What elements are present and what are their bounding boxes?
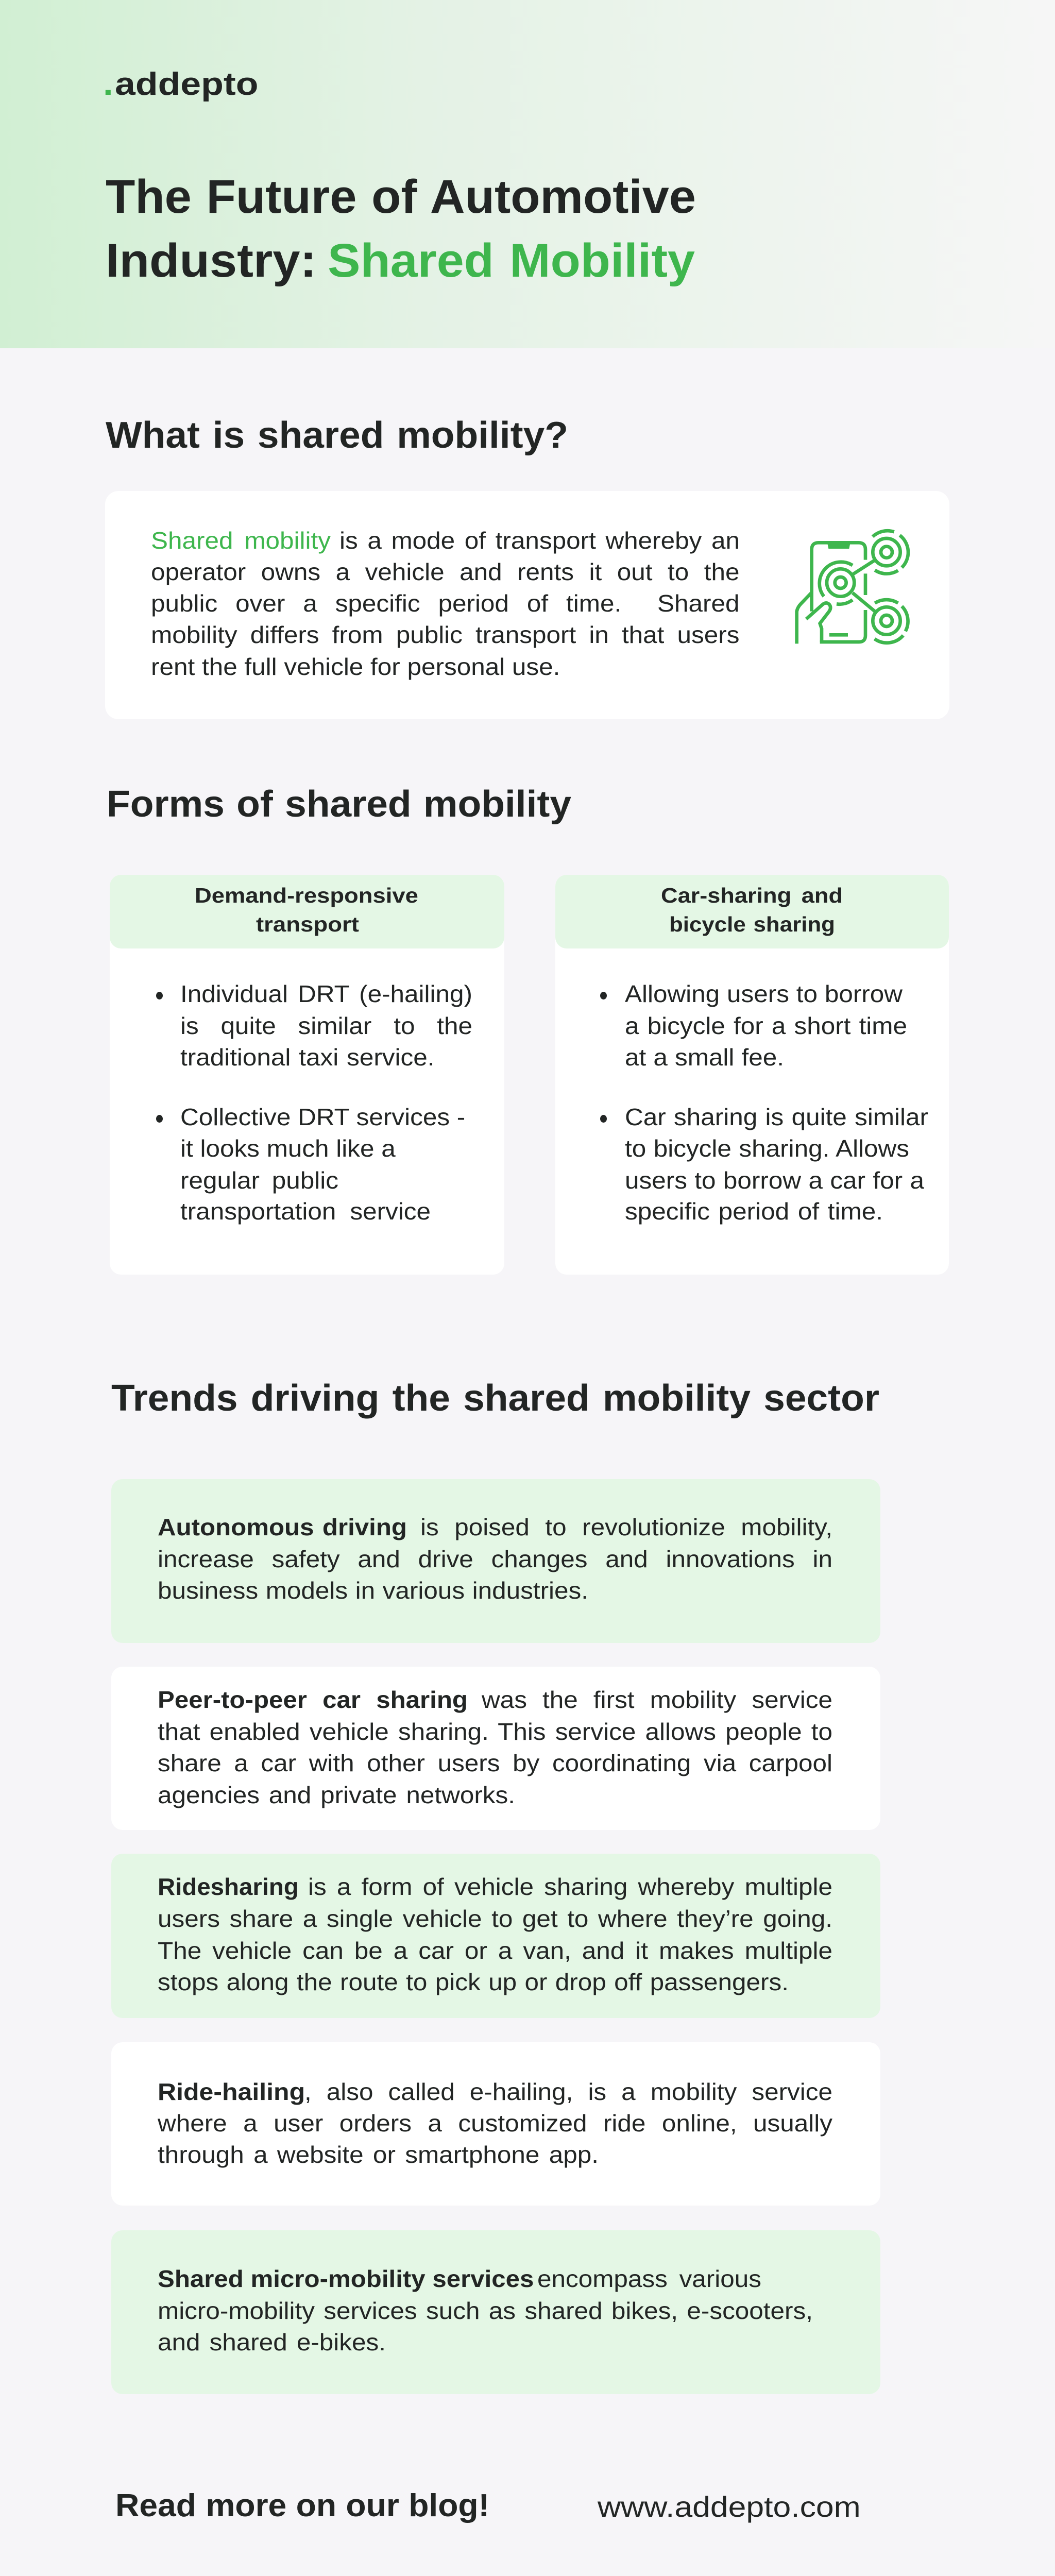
bullet: car sharing: to bicycle sharing. Allows xyxy=(625,1135,909,1162)
bullet: individual DRT: Individual DRT (e-hailing) xyxy=(180,980,472,1007)
bullet: collective DRT: it looks much like a xyxy=(180,1135,396,1162)
bullet: collective DRT: regular public xyxy=(180,1167,338,1194)
text block: definition: is a mode of transport whereby an xyxy=(339,527,739,554)
bullet: individual DRT: traditional taxi service. xyxy=(180,1044,434,1071)
bullet: individual DRT xyxy=(156,980,472,1071)
text block: autonomous driving: business models in various industries. xyxy=(158,1577,588,1604)
text block: shared micro-mobility services xyxy=(158,2265,813,2355)
text block: definition xyxy=(151,527,739,680)
text block: peer-to-peer car sharing xyxy=(158,1686,832,1808)
panel: autonomous driving xyxy=(111,1479,880,1643)
text block: ride-hailing: , also called e-hailing, is a mobility service xyxy=(304,2078,832,2105)
logo: addepto: . xyxy=(103,66,113,102)
bullet: car sharing: users to borrow a car for a xyxy=(625,1167,924,1194)
card header: car-sharing and bicycle sharing: bicycle sharing xyxy=(669,912,835,936)
panel: ridesharing xyxy=(111,1854,880,2018)
text block: shared micro-mobility services: encompass various xyxy=(537,2265,761,2292)
bullet: car sharing: specific period of time. xyxy=(625,1198,883,1225)
text block: ridesharing xyxy=(158,1873,832,1995)
text block: shared micro-mobility services: Shared micro-mobility services xyxy=(158,2265,534,2292)
panel: peer-to-peer car sharing xyxy=(111,1667,880,1830)
panel: demand-responsive transport xyxy=(110,875,504,1275)
text block: definition: mobility differs from public transport in that users xyxy=(151,621,739,648)
text block: definition: rent the full vehicle for personal use. xyxy=(151,653,560,680)
bullet: collective DRT: transportation service xyxy=(180,1198,431,1225)
text block: ridesharing: is a form of vehicle sharing whereby multiple xyxy=(308,1873,832,1900)
card header: car-sharing and bicycle sharing xyxy=(555,875,949,948)
logo: addepto: addepto xyxy=(115,66,258,102)
panel: ride-hailing xyxy=(111,2042,880,2206)
bullet: collective DRT xyxy=(156,1104,465,1225)
text block: shared micro-mobility services: and shared e-bikes. xyxy=(158,2329,386,2355)
bullet: bicycle sharing xyxy=(600,980,907,1071)
panel: shared micro-mobility services xyxy=(111,2230,880,2394)
footer call to action: Read more on our blog! xyxy=(115,2488,489,2523)
title: The Future of Automotive xyxy=(106,171,696,223)
text block: peer-to-peer car sharing: share a car with other users by coordinating via carpool xyxy=(158,1750,832,1776)
header banner xyxy=(0,0,1055,348)
text block: ridesharing: Ridesharing xyxy=(158,1873,299,1900)
text block: ridesharing: The vehicle can be a car or a van, and it makes multiple xyxy=(158,1937,832,1964)
text block: peer-to-peer car sharing: was the first mobility service xyxy=(482,1686,832,1713)
text block: peer-to-peer car sharing: Peer-to-peer car sharing xyxy=(158,1686,468,1713)
text block: ride-hailing: Ride-hailing xyxy=(158,2078,305,2105)
bullet: car sharing xyxy=(600,1104,928,1225)
title: Industry: xyxy=(106,234,316,287)
bullet: car sharing: Car sharing is quite similar xyxy=(625,1104,928,1130)
text block: peer-to-peer car sharing: agencies and private networks. xyxy=(158,1782,515,1808)
footer website address: www.addepto.com xyxy=(598,2490,861,2523)
text block: autonomous driving: increase safety and drive changes and innovations in xyxy=(158,1546,832,1572)
bullet: collective DRT: Collective DRT services - xyxy=(180,1104,465,1130)
heading: forms of shared mobility: Forms of shared mobility xyxy=(107,784,571,825)
panel: definition of shared mobility xyxy=(105,491,949,719)
panel: car-sharing and bicycle sharing xyxy=(555,875,949,1275)
text block: shared micro-mobility services: micro-mobility services such as shared bikes, e-scooters, xyxy=(158,2297,813,2324)
text block: autonomous driving: Autonomous driving xyxy=(158,1514,407,1540)
bullet: bicycle sharing: Allowing users to borrow xyxy=(625,980,903,1007)
card header: car-sharing and bicycle sharing: Car-sharing and xyxy=(661,884,843,907)
card header: demand-responsive transport xyxy=(110,875,504,948)
text block: definition: operator owns a vehicle and rents it out to the xyxy=(151,558,739,585)
text block: definition: public over a specific period of time. Shared xyxy=(151,590,739,617)
card header: demand-responsive transport: transport xyxy=(256,912,359,936)
text block: ride-hailing: through a website or smartphone app. xyxy=(158,2141,599,2168)
text block: peer-to-peer car sharing: that enabled vehicle sharing. This service allows people to xyxy=(158,1718,832,1745)
text block: ride-hailing: where a user orders a customized ride online, usually xyxy=(158,2110,832,2137)
text block: ride-hailing xyxy=(158,2078,832,2168)
title xyxy=(106,171,696,287)
bullet: bicycle sharing: at a small fee. xyxy=(625,1044,784,1071)
text block: autonomous driving xyxy=(158,1514,832,1604)
text block: autonomous driving: is poised to revolutionize mobility, xyxy=(420,1514,832,1540)
heading: trends driving the shared mobility sector: Trends driving the shared mobility sector xyxy=(111,1378,879,1419)
bullet: individual DRT: is quite similar to the xyxy=(180,1012,472,1039)
text block: ridesharing: users share a single vehicle to get to where they’re going. xyxy=(158,1905,832,1932)
title: Shared Mobility xyxy=(328,234,695,287)
text block: ridesharing: stops along the route to pick up or drop off passengers. xyxy=(158,1969,789,1995)
card header: demand-responsive transport: Demand-responsive xyxy=(195,884,418,907)
bullet: bicycle sharing: a bicycle for a short time xyxy=(625,1012,907,1039)
heading: what is shared mobility: What is shared mobility? xyxy=(106,415,568,456)
icon: hand holding smartphone with connected nodes xyxy=(795,529,910,645)
text block: definition: Shared mobility xyxy=(151,527,331,554)
